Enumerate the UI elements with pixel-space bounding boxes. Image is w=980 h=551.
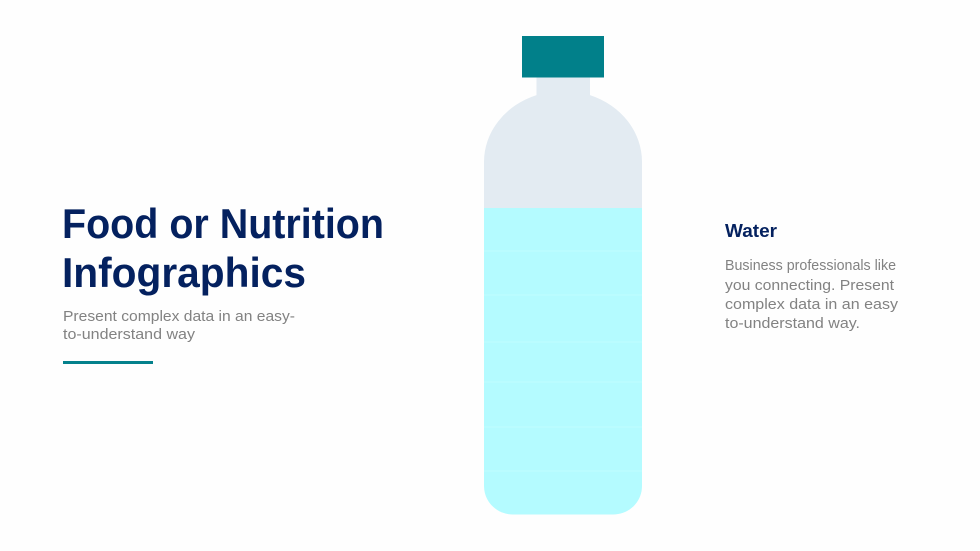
water description <box>725 257 899 332</box>
bottle neck and empty upper body <box>484 77 642 209</box>
subtitle <box>63 308 295 343</box>
water description: you connecting. Present <box>725 277 895 294</box>
bottle <box>484 36 642 514</box>
water description: Business professionals like <box>725 257 896 274</box>
title: Food or Nutrition <box>62 200 384 247</box>
bottle cap <box>522 36 604 78</box>
title: Infographics <box>62 249 306 296</box>
accent line <box>63 361 153 364</box>
title <box>62 200 384 296</box>
subtitle: to-understand way <box>63 326 196 343</box>
subtitle: Present complex data in an easy- <box>63 308 295 325</box>
water description: complex data in an easy <box>725 296 899 313</box>
water level marks <box>484 251 642 471</box>
water fill <box>484 208 642 514</box>
water heading: Water <box>725 221 777 241</box>
water description: to-understand way. <box>725 315 860 332</box>
